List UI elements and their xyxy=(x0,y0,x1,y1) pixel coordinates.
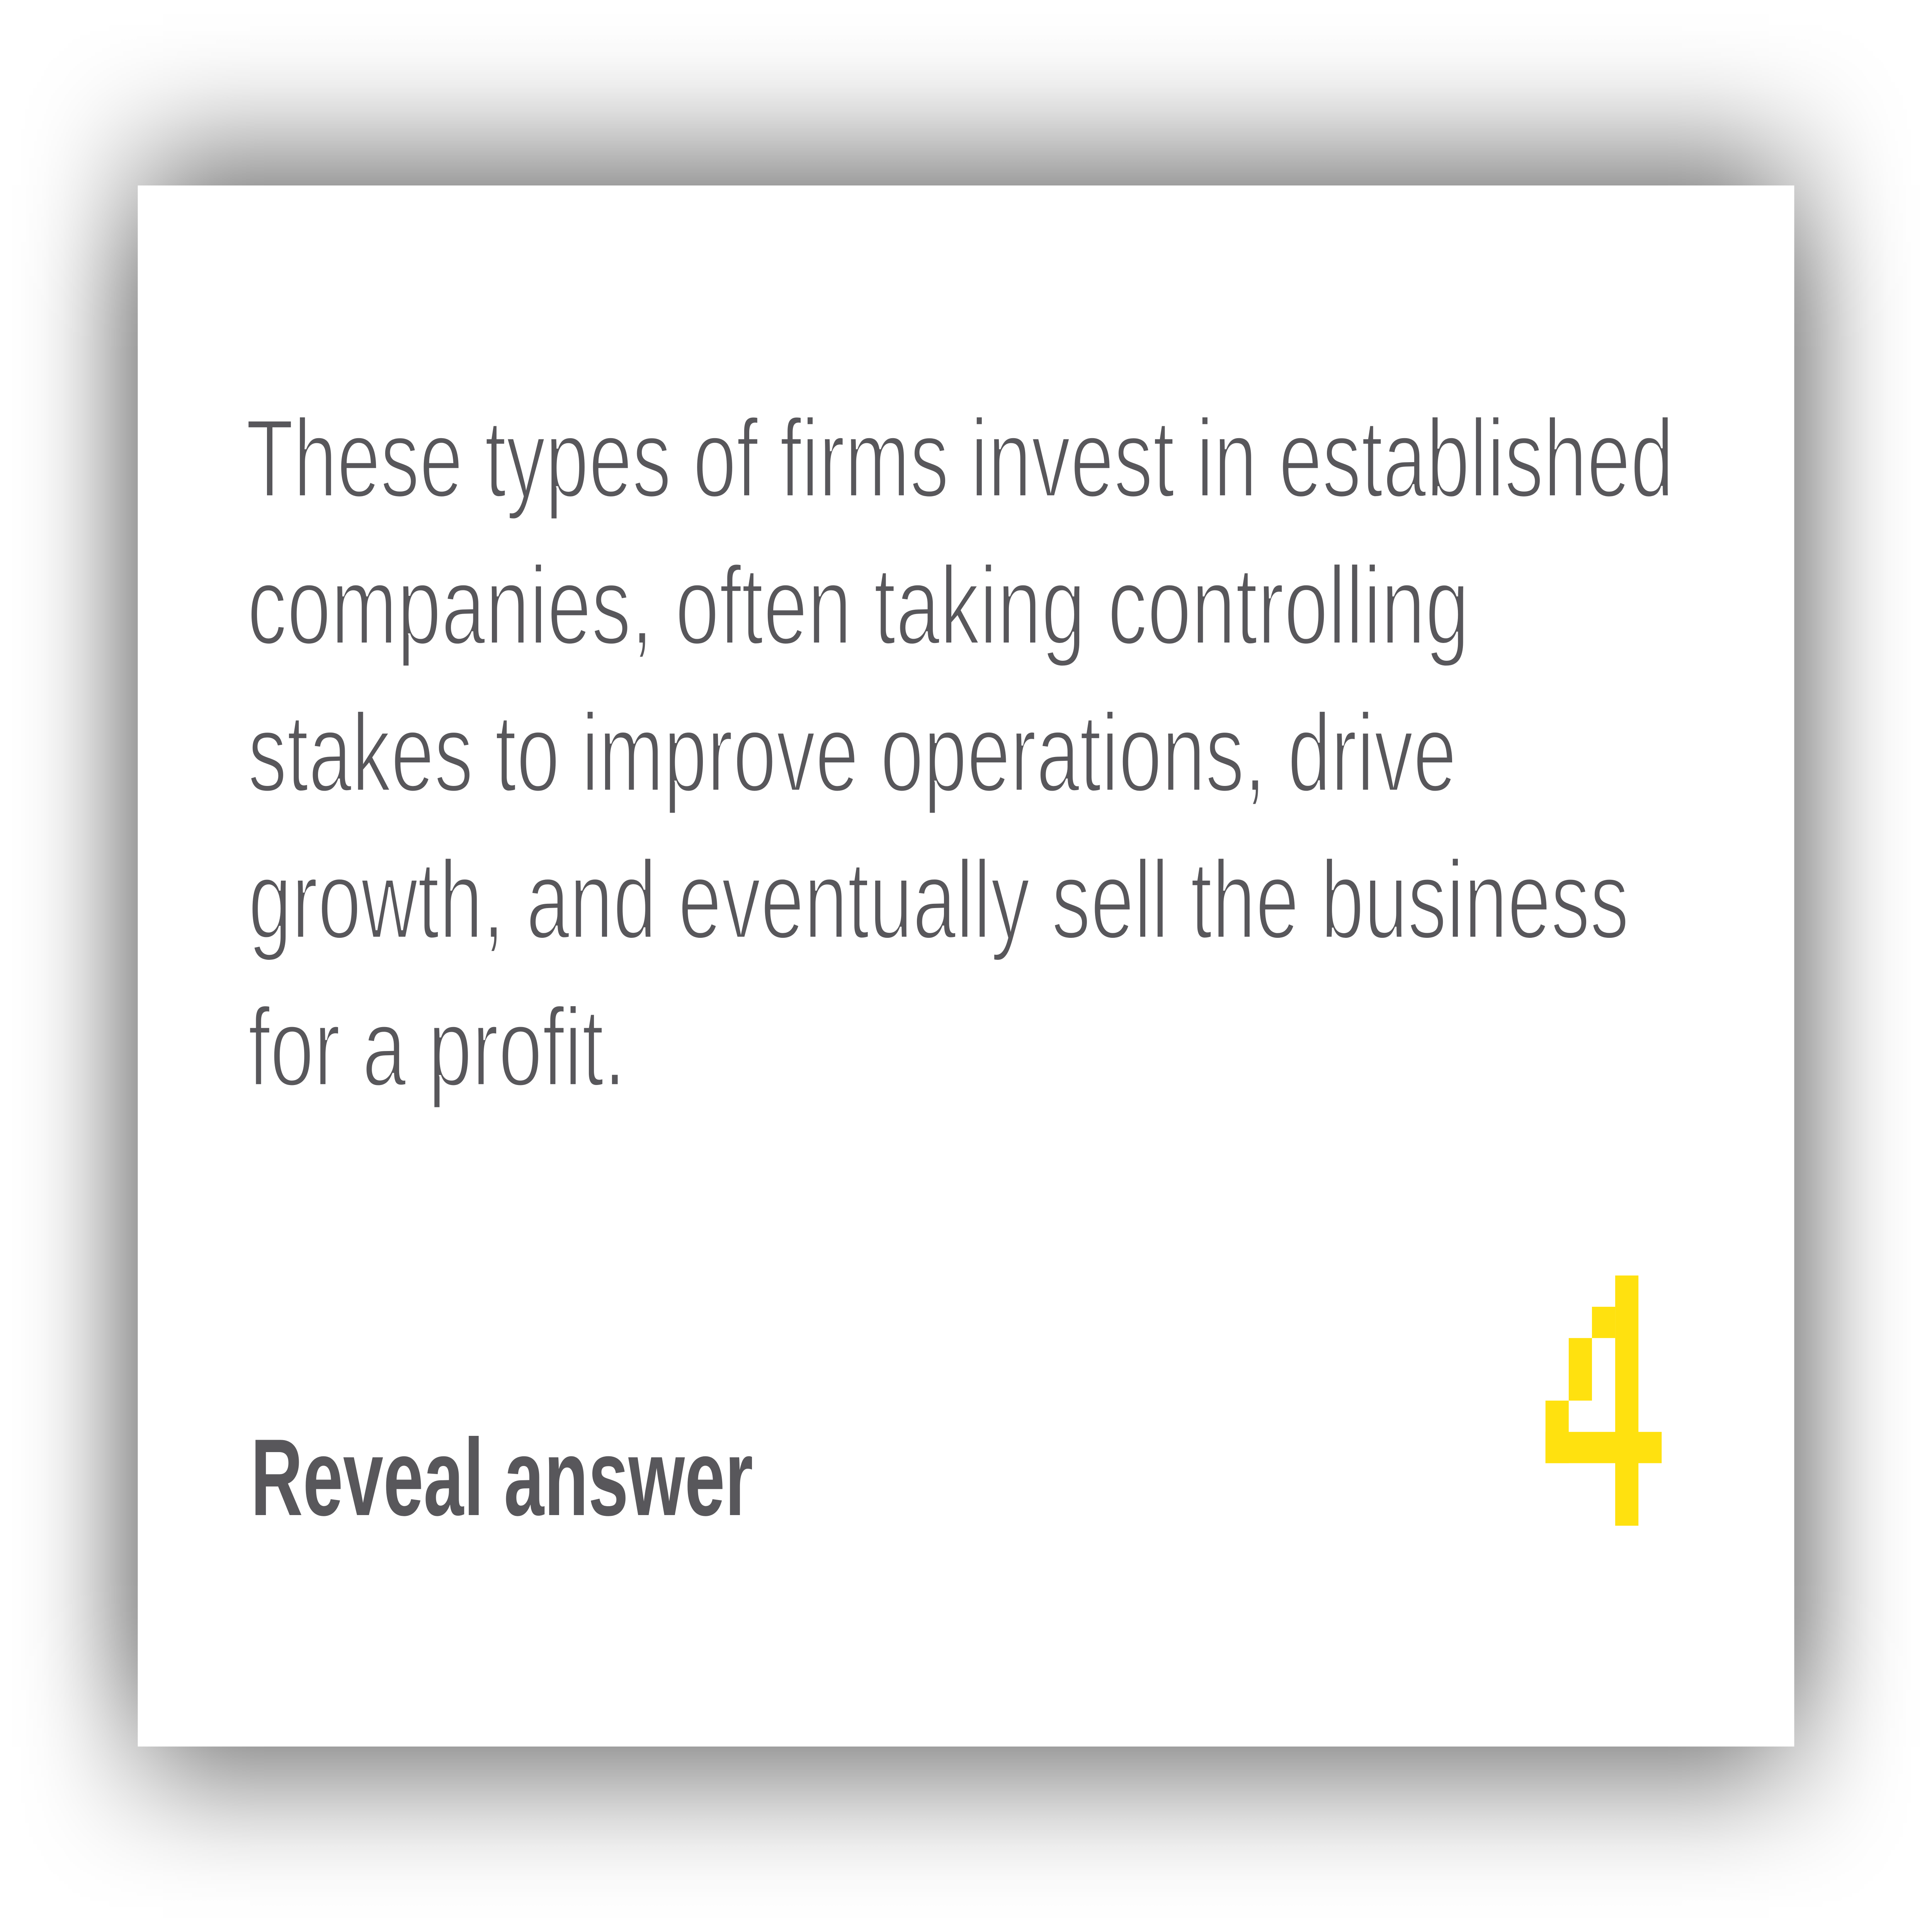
text block: question clue: companies, often taking controlling xyxy=(247,543,1469,667)
text block: question clue: stakes to improve operations, drive xyxy=(248,690,1456,815)
text block: question clue: growth, and eventually sell the business xyxy=(248,838,1629,962)
text block: question clue: for a profit. xyxy=(248,985,626,1109)
panel: question card xyxy=(138,185,1794,1747)
text block: question clue xyxy=(246,396,1674,1109)
button label: reveal answer: Reveal answer xyxy=(251,1416,753,1538)
text block: question clue: These types of firms invest in established xyxy=(246,396,1674,520)
icon: pixel number 4 xyxy=(1546,1276,1662,1526)
